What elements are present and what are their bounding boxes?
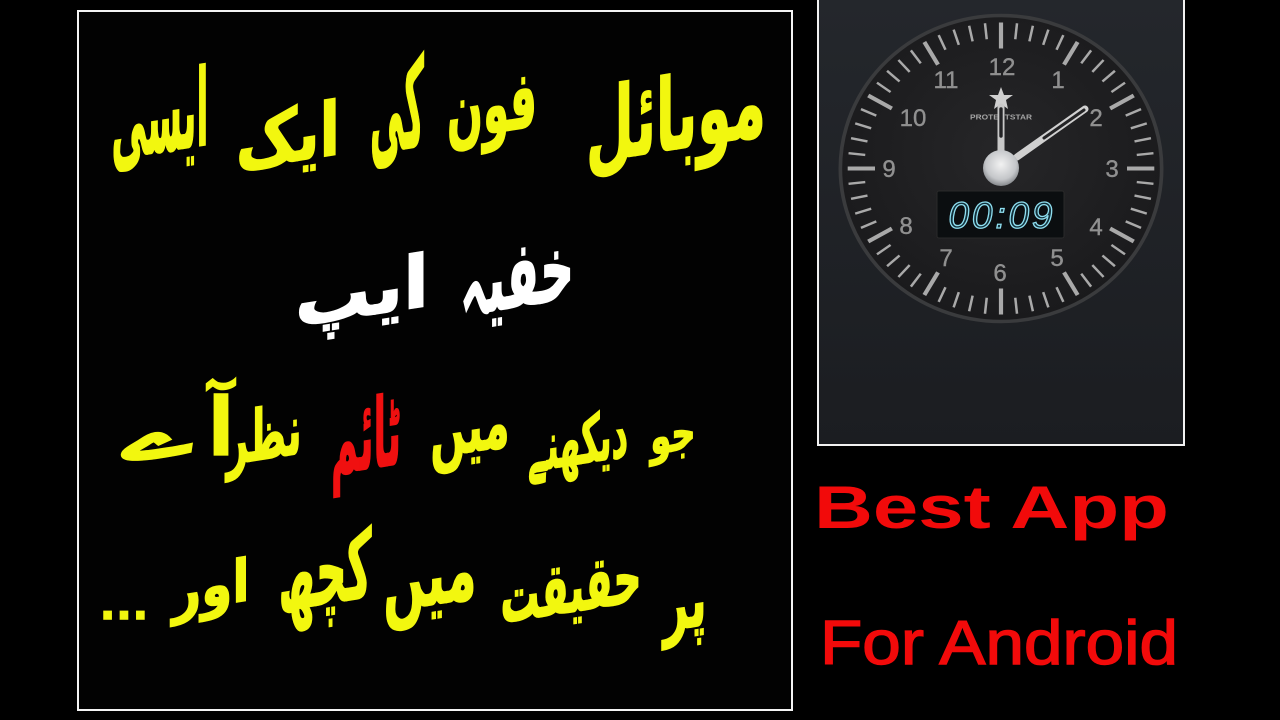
label: Best App: Best App	[814, 474, 1169, 541]
text line 4: but in reality something else: ...	[100, 583, 148, 629]
text line 3: looks like time: ے	[121, 393, 192, 478]
clock numerals: 7	[939, 245, 953, 272]
heading line 1: mobile phone ki ek aisi: کی	[370, 29, 424, 184]
heading line 1: mobile phone ki ek aisi: موبائل	[586, 42, 766, 188]
heading line 1: mobile phone ki ek aisi: ایسی	[112, 46, 208, 186]
clock numerals	[882, 54, 1119, 287]
heading line 2: khufia app: خفیہ	[460, 213, 574, 338]
text line 4: but in reality something else: کچھ	[278, 508, 372, 634]
clock hub	[983, 150, 1019, 186]
text line 3: looks like time: آ	[206, 378, 235, 474]
text line 4: but in reality something else: حقیقت	[500, 535, 642, 641]
text line 3: looks like time: جو	[649, 404, 696, 467]
text line 3: looks like time: میں	[430, 380, 510, 476]
panel: clock app screenshot	[818, 0, 1184, 445]
panel: Urdu headline frame	[78, 11, 792, 710]
heading line 1: mobile phone ki ek aisi	[112, 29, 766, 188]
clock numerals: 1	[1051, 67, 1065, 94]
clock numerals: 6	[993, 260, 1007, 287]
text line 3: looks like time: نظر	[225, 388, 302, 482]
clock numerals: 2	[1089, 105, 1103, 132]
clock numerals: 10	[900, 105, 926, 132]
clock hands	[1001, 107, 1085, 157]
digital time display: 00:09	[948, 195, 1052, 236]
text line 3: looks like time: دیکھنے	[528, 394, 628, 489]
text line 4: but in reality something else: پر	[661, 555, 707, 651]
heading line 1: mobile phone ki ek aisi: ایک	[236, 85, 340, 188]
clock numerals: 11	[934, 67, 958, 94]
clock numerals: 3	[1105, 156, 1119, 183]
text line 4: but in reality something else	[100, 508, 706, 651]
text line 3: looks like time	[121, 374, 696, 498]
clock numerals: 4	[1089, 214, 1103, 241]
clock numerals: 12	[989, 54, 1015, 81]
clock numerals: 9	[882, 156, 896, 183]
minute and hour tick marks	[837, 12, 1165, 325]
clock numerals: 5	[1050, 245, 1064, 272]
clock face	[837, 12, 1165, 325]
icon: Protectstar logo	[970, 87, 1033, 122]
text line 4: but in reality something else: اور	[170, 546, 250, 627]
label: For Android: For Android	[820, 609, 1178, 678]
heading line 2: khufia app: ایپ	[295, 240, 429, 344]
text line 3: looks like time: ٹائم	[331, 374, 401, 498]
clock numerals: 8	[899, 213, 913, 240]
heading line 2: khufia app	[295, 213, 574, 344]
text line 4: but in reality something else: میں	[383, 520, 477, 633]
heading line 1: mobile phone ki ek aisi: فون	[447, 51, 537, 160]
icon: Protectstar logo: PROTECTSTAR	[970, 112, 1033, 122]
